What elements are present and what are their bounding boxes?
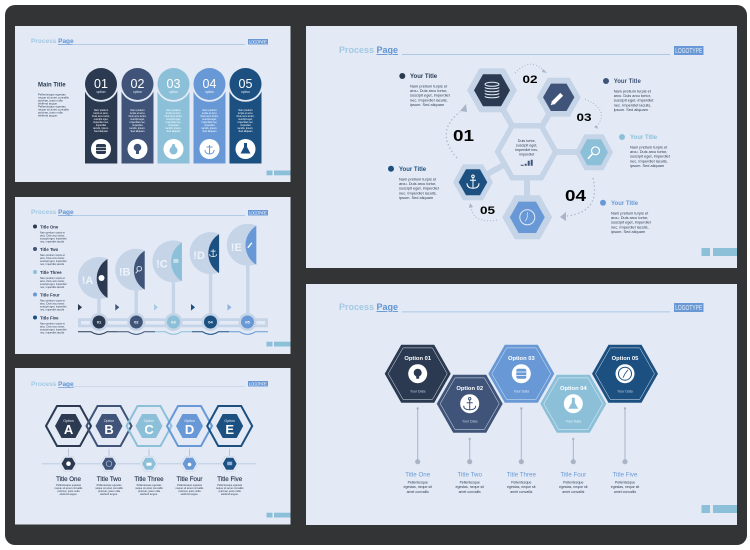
dashed arrow 05 [469,203,497,221]
item three: eleifend augue. [140,492,158,496]
logotype [674,303,704,312]
option 05: Your Data [617,390,633,394]
title list: arcu. Duis arcu tortor, [40,324,65,328]
note 1: suscipit eget, imperdiet [410,93,451,98]
note 1: ipsum. Sed aliquam [410,102,444,107]
dashed arrow 01 [446,104,467,158]
column 04: option [205,90,214,94]
moon D: !D [193,250,205,262]
column 03: imperdiet nec, [166,121,182,124]
column 02: imperdiet nec, [130,121,146,124]
dashed arrow 04 [560,178,595,221]
center hexagon: suscipit eget, [516,144,537,148]
column 01: iaculis, ipsum. [93,127,109,130]
column 02: Nam pretium [130,109,145,112]
option 05: Option 05 [612,356,639,362]
dashed arrow 03 [585,99,601,129]
option 03: Option 03 [508,356,535,362]
column 05: turpis et arcu. [238,112,253,115]
item four: Title Four [177,476,202,483]
column 03: option [169,90,178,94]
title list: arcu. Duis arcu tortor, [40,279,65,283]
item one: Title One [56,476,81,483]
column 04: 04 [203,77,216,91]
item two: Title Two [97,476,122,483]
hexagon C [126,406,172,446]
item four: pulvinar, justo nulla [178,489,201,493]
column 01 [83,66,119,164]
column 01: 01 [94,77,108,91]
option 04: Your Data [566,420,581,424]
column 03: imperdiet [168,124,179,127]
heading: Process Page [31,38,74,45]
note 3: arcu. Duis arcu tortor, [630,149,667,154]
moon B: !B [119,267,131,279]
number 01: 01 [453,128,474,145]
note 5: Nam pretium turpis et [399,176,437,181]
note 2: suscipit eget, imperdiet [614,98,654,103]
node 01: 01 [97,320,102,324]
heading: Process Page [339,302,398,312]
column 05: imperdiet [240,124,251,127]
note 3: Nam pretium turpis et [630,144,668,149]
column 01: imperdiet [96,124,106,127]
option 02: Option 02 [456,386,483,392]
column 03: Sed aliquam [167,130,180,133]
number 03: 03 [576,112,592,124]
main title text block: Pellentesque egestas [38,92,66,96]
column 01: Sed aliquam [94,130,108,133]
number 04: 04 [565,188,586,205]
item: title four: Pellentesque [563,480,583,484]
title list: arcu. Duis arcu tortor, [40,302,65,306]
logotype: LOGOTYPE [249,210,267,216]
connectors [473,90,594,217]
column 02: option [133,90,142,94]
note 3: nec. Imperdiet iaculis, [630,158,668,163]
hexagon: pencil [537,78,581,117]
logotype [674,46,704,55]
item three: Title Three [134,476,164,483]
dashed arrow 02 [515,64,547,73]
title list: Nam pretium turpis et [40,298,65,302]
option 03: Your Data [514,390,529,394]
column 02: Sed aliquam [131,130,144,133]
hexagon A [46,406,91,446]
note 3: suscipit eget, imperdiet [630,154,671,159]
title list: suscipit eget, imperdiet [40,259,67,263]
center hexagon: imperdiet nec, [515,148,538,152]
column 05: imperdiet nec, [238,121,254,124]
moon C [152,240,182,315]
item: title two: Pellentesque [460,480,480,484]
page number [266,342,290,346]
note 4: ipsum. Sed aliquam [611,229,645,234]
item: title two: Title Two [457,472,482,478]
option 04 [540,375,606,433]
column 04: iaculis, ipsum. [202,127,218,130]
main title text block: pulvinar, justo nulla [38,98,63,102]
item two: eleifend augue. [100,492,118,496]
item four: neque sit amet convallis [176,486,204,490]
item one [55,449,83,496]
title list: nec, imperdiet iaculis [40,285,65,289]
logotype: LOGOTYPE [249,382,267,386]
item: title one: amet convallis [407,490,429,494]
column 01: suscipit eget, [94,118,109,121]
item: title five: Pellentesque [615,480,635,484]
title list: Title Three [40,270,62,275]
title list: Nam pretium turpis et [40,230,65,234]
item: title three: egestas, neque sit [507,485,536,489]
column 01: option [97,90,106,94]
note 2: arcu. Duis arcu tortor, [614,93,651,98]
item two: pulvinar, justo nulla [98,489,121,493]
item four: Pellentesque egestas [177,483,203,487]
option 01 [385,345,451,403]
title list: arcu. Duis arcu tortor, [40,234,65,238]
column 02: Duis arcu tortor, [129,115,147,118]
hexagon D [167,406,212,446]
main title text block: pulvinar, justo nulla [38,110,63,114]
title list: Title Four [40,292,60,297]
arrows [78,304,232,311]
item: title four: Title Four [560,472,586,478]
center hexagon [498,126,556,178]
item one: eleifend augue. [60,492,78,496]
column 02: imperdiet [132,124,143,127]
option 02: Your Data [462,420,477,424]
hexagon: clock [502,195,552,239]
title list: Title Five [40,315,59,320]
column 04: Duis arcu tortor, [201,115,219,118]
column 03: 03 [167,77,180,91]
column 03: Duis arcu tortor, [165,115,183,118]
node 05: 05 [245,320,250,324]
item five [216,449,244,496]
note 4: nec. Imperdiet iaculis, [611,224,649,229]
node 04 [202,313,220,331]
column 03: turpis et arcu. [166,112,181,115]
title list: suscipit eget, imperdiet [40,304,67,308]
hexagon E: E [225,422,234,437]
center hexagon: Duis tortor, [518,139,536,143]
column 01: Nam pretium [94,109,108,112]
item: title five: amet convallis [614,490,636,494]
column 03: suscipit eget, [166,118,181,121]
moon C: !C [156,258,168,270]
column 01: turpis et arcu. [93,112,109,115]
logotype: LOGOTYPE [675,48,702,55]
column 05: Duis arcu tortor, [237,115,255,118]
moon B [115,249,145,315]
column 04: turpis et arcu. [202,112,217,115]
column 04 [192,66,227,164]
panel: hexagon cycle slide [306,26,737,268]
option 05 [592,345,658,403]
title list [33,224,67,334]
note 1: arcu. Duis arcu tortor, [410,88,447,93]
column 03: iaculis, ipsum. [166,127,182,130]
column 03 [156,66,191,164]
item two: Pellentesque egestas [97,483,122,487]
note 2: Your Title [614,79,641,85]
item one: Pellentesque egestas [56,483,82,487]
item: title one: Title One [405,472,431,478]
note 1: Nam pretium turpis et [410,83,448,88]
node 04: 04 [208,320,213,324]
heading: Process Page [31,381,74,388]
item: title three: Title Three [507,472,536,478]
main title text block: eleifend augue. [38,102,58,106]
note 2: ipsum. Sed aliquam [614,107,648,112]
title list: nec, imperdiet iaculis [40,308,65,312]
title list: Title One [40,224,59,229]
hexagon B: Option [104,419,114,423]
item: title one: Pellentesque [408,480,428,484]
hexagon A: A [64,422,74,437]
note 5: Your Title [399,167,427,173]
title list: Nam pretium turpis et [40,276,65,280]
center hexagon: imperdiet [519,153,534,157]
option 01: Option 01 [404,356,432,362]
column 02: 02 [131,77,144,91]
column 05: option [241,90,250,94]
column 05: suscipit eget, [238,118,253,121]
node 03: 03 [171,320,176,324]
item four: eleifend augue. [181,492,199,496]
logotype: LOGOTYPE [249,40,267,44]
page number [266,170,290,175]
column 03: Nam pretium [166,109,181,112]
title list: suscipit eget, imperdiet [40,282,67,286]
column 04: imperdiet nec, [202,121,218,124]
column 05 [228,66,263,164]
main title text block: eleifend augue. [38,114,58,118]
item five: eleifend augue. [221,492,239,496]
note 1: Your Title [410,74,438,80]
connector line [42,463,256,464]
item two: neque sit amet convallis [95,486,124,490]
item: title three: amet convallis [510,490,533,494]
column 04: Sed aliquam [203,130,216,133]
hexagon E: Option [224,419,235,423]
hexagon C: C [144,422,154,437]
moon E: !E [231,242,242,254]
title list: suscipit eget, imperdiet [40,328,67,332]
panel: numbered columns slide [15,26,290,182]
page number [702,505,737,513]
main title text block [38,82,69,118]
item one: neque sit amet convallis [55,486,83,490]
title list: nec, imperdiet iaculis [40,262,65,266]
column 05: 05 [239,77,252,91]
column 05: Nam pretium [238,109,253,112]
moon E [227,224,256,315]
item: title two: egestas, neque sit [455,485,484,489]
note 2 [603,78,654,112]
column 02: iaculis, ipsum. [130,127,146,130]
item three: neque sit amet convallis [135,486,164,490]
note 5 [388,166,440,200]
timeline track [78,318,268,334]
column 05: Sed aliquam [239,130,252,133]
node 02: 02 [134,320,139,324]
item two [95,449,124,496]
heading: Process Page [339,45,398,55]
item four [176,449,204,496]
page number [702,248,737,256]
title list: suscipit eget, imperdiet [40,236,67,240]
note 3: Your Title [630,135,658,141]
item: title four: egestas, neque sit [559,485,588,489]
node 01 [90,313,108,331]
column 01: imperdiet nec, [93,121,109,124]
column 04: suscipit eget, [202,118,217,121]
note 3 [619,134,671,168]
hexagon B [86,406,132,446]
logotype: LOGOTYPE [675,305,702,312]
panel: moon timeline slide [15,197,290,354]
note 4: arcu. Duis arcu tortor, [611,215,648,220]
item: title four [559,438,588,494]
option 04: Option 04 [560,386,587,392]
column 02: suscipit eget, [130,118,145,121]
item five: Title Five [217,476,243,483]
hexagon: database [467,68,517,112]
item five: Pellentesque egestas [217,483,243,487]
option 02 [437,375,503,433]
column 05: iaculis, ipsum. [238,127,254,130]
node 05 [238,313,256,331]
moon D [190,232,219,315]
item five: neque sit amet convallis [216,486,244,490]
number 05: 05 [480,205,495,217]
hexagon: magnifier [575,134,613,170]
moon A: !A [82,275,93,287]
title list: nec, imperdiet iaculis [40,240,65,244]
hexagon B: B [104,422,114,437]
panel: lettered hexagons slide [15,368,290,524]
title list: Title Two [40,247,59,252]
item three: Pellentesque egestas [137,483,162,487]
column 04: imperdiet [204,124,215,127]
item: title five: Title Five [613,472,638,478]
column 04: Nam pretium [202,109,217,112]
main title text block: Pellentesque egestas [38,104,66,108]
hexagon: anchor [453,164,493,200]
node 03 [164,313,182,331]
option 03 [488,345,554,403]
note 2: nec. Imperdiet iaculis, [614,102,651,107]
note 1: nec. Imperdiet iaculis, [410,97,448,102]
moon A [78,257,108,315]
note 5: arcu. Duis arcu tortor, [399,181,436,186]
page number [266,513,290,518]
title list: nec, imperdiet iaculis [40,330,65,334]
note 1 [399,73,451,107]
item: title three [507,407,536,494]
note 2: Nam pretium turpis et [614,88,652,93]
hexagon D: Option [184,419,195,423]
item one: pulvinar, justo nulla [57,489,80,493]
number 02: 02 [522,74,538,86]
item: title one: egestas, neque sit [403,485,432,489]
hexagon A: Option [63,419,74,423]
panel: staggered option hexagons slide [306,284,737,525]
column 02 [120,66,155,164]
note 4: Your Title [611,201,639,207]
main title text block: Main Title [38,82,66,88]
item: title three: Pellentesque [511,480,531,484]
item: title two [455,438,484,494]
note 5: suscipit eget, imperdiet [399,186,440,191]
item: title one [403,407,432,494]
title list: Nam pretium turpis et [40,253,65,257]
note 4: suscipit eget, imperdiet [611,220,652,225]
hexagon E [207,406,252,446]
item: title four: amet convallis [562,490,585,494]
column 01: Duis arcu tortor, [92,115,110,118]
main title text block: neque sit amet convallis [38,96,69,100]
note 3: ipsum. Sed aliquam [630,163,664,168]
hexagon D: D [185,422,194,437]
title list: Nam pretium turpis et [40,322,65,326]
title list: arcu. Duis arcu tortor, [40,256,65,260]
note 4: Nam pretium turpis et [611,210,649,215]
note 5: nec. Imperdiet iaculis, [399,190,437,195]
column 02: turpis et arcu. [130,112,145,115]
item: title two: amet convallis [459,490,481,494]
item five: pulvinar, justo nulla [219,489,241,493]
item three: pulvinar, justo nulla [138,489,161,493]
option 01: Your Data [410,390,425,394]
item three [134,449,164,496]
item: title five: egestas, neque sit [611,485,639,489]
note 4 [600,200,652,234]
note 5: ipsum. Sed aliquam [399,195,433,200]
node 02 [127,313,145,331]
heading: Process Page [31,209,74,216]
hexagon C: Option [144,419,154,423]
item: title five [611,407,639,494]
main title text block: neque sit amet convallis [38,108,69,112]
